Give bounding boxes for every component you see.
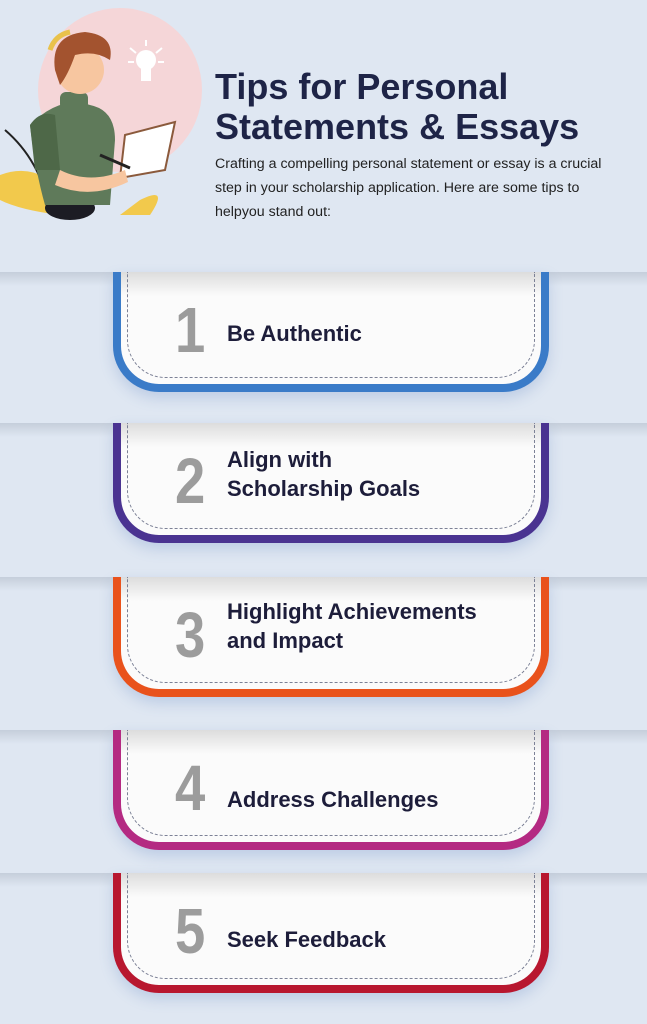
lightbulb [128, 40, 164, 81]
illustration: woman writing [0, 8, 202, 220]
card 2: Align with [227, 447, 332, 472]
intro text: Crafting a compelling personal statement or essay is a crucial step in your scholarship application. Here are some tips to helpyou stand out: [215, 156, 601, 220]
card 4 [113, 730, 549, 850]
card 2: Scholarship Goals [227, 476, 420, 501]
card 1: Be Authentic [227, 321, 362, 346]
card 5 [113, 873, 549, 993]
card 4: 4 [175, 752, 205, 824]
title: Tips for Personal [215, 66, 508, 107]
card 3: and Impact [227, 628, 343, 653]
card 2 [113, 423, 549, 543]
title: Statements & Essays [215, 106, 579, 147]
card 1 [113, 272, 549, 392]
card 1: 1 [175, 294, 205, 366]
card 3: Highlight Achievements [227, 599, 477, 624]
card 5: 5 [175, 895, 205, 967]
card 3 [113, 577, 549, 697]
title [215, 66, 579, 147]
card 5: Seek Feedback [227, 927, 386, 952]
card 2: 2 [175, 445, 205, 517]
card 4: Address Challenges [227, 787, 439, 812]
card 3: 3 [175, 599, 205, 671]
